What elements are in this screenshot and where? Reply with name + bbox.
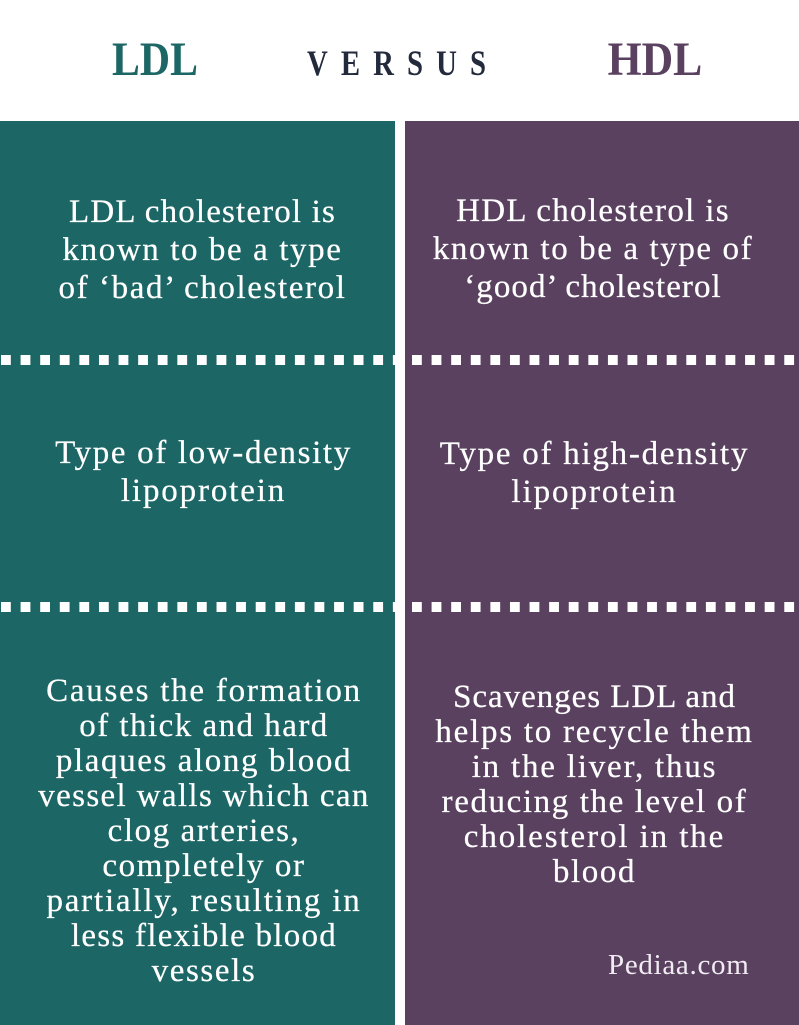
text: LDL effects: vessel walls which can bbox=[38, 778, 370, 814]
text: LDL definition: of ‘bad’ cholesterol bbox=[59, 270, 346, 306]
text: LDL definition: LDL cholesterol is bbox=[69, 194, 336, 230]
text: LDL density type: lipoprotein bbox=[121, 473, 286, 509]
text: HDL definition: HDL cholesterol is bbox=[456, 193, 730, 229]
text: LDL effects: less flexible blood bbox=[71, 918, 337, 954]
text: HDL density type: Type of high-density bbox=[440, 436, 749, 472]
heading: HDL: HDL bbox=[607, 33, 702, 86]
text: LDL density type bbox=[55, 435, 352, 509]
text: LDL effects: plaques along blood bbox=[56, 743, 352, 779]
text: LDL effects: clog arteries, bbox=[108, 813, 300, 849]
text: LDL effects: vessels bbox=[152, 953, 256, 989]
text: HDL density type: lipoprotein bbox=[511, 474, 678, 510]
text: LDL effects: completely or bbox=[102, 848, 306, 884]
text: LDL effects: of thick and hard bbox=[79, 708, 329, 744]
text: HDL effects: cholesterol in the bbox=[464, 819, 725, 855]
heading: versus: VERSUS bbox=[307, 43, 499, 83]
panel: LDL column bbox=[0, 121, 395, 1025]
text: HDL effects: in the liver, thus bbox=[472, 749, 717, 785]
panel: HDL column bbox=[405, 121, 799, 1025]
text: LDL definition bbox=[59, 194, 346, 306]
text: HDL effects bbox=[435, 679, 754, 890]
text: LDL definition: known to be a type bbox=[63, 232, 342, 268]
text: HDL definition bbox=[433, 193, 753, 305]
text: LDL effects bbox=[38, 673, 370, 989]
text: HDL effects: blood bbox=[553, 854, 636, 890]
heading: LDL: LDL bbox=[112, 33, 198, 86]
text: HDL definition: ‘good’ cholesterol bbox=[464, 269, 722, 305]
text: HDL density type bbox=[440, 436, 749, 510]
text: HDL definition: known to be a type of bbox=[433, 231, 753, 267]
text: LDL effects: partially, resulting in bbox=[46, 883, 362, 919]
logo: Pediaa.com: Pediaa.com bbox=[608, 949, 749, 981]
text: HDL effects: Scavenges LDL and bbox=[453, 679, 736, 715]
text: LDL effects: Causes the formation bbox=[46, 673, 362, 709]
text: HDL effects: helps to recycle them bbox=[435, 714, 754, 750]
text: HDL effects: reducing the level of bbox=[442, 784, 747, 820]
text: LDL density type: Type of low-density bbox=[55, 435, 352, 471]
